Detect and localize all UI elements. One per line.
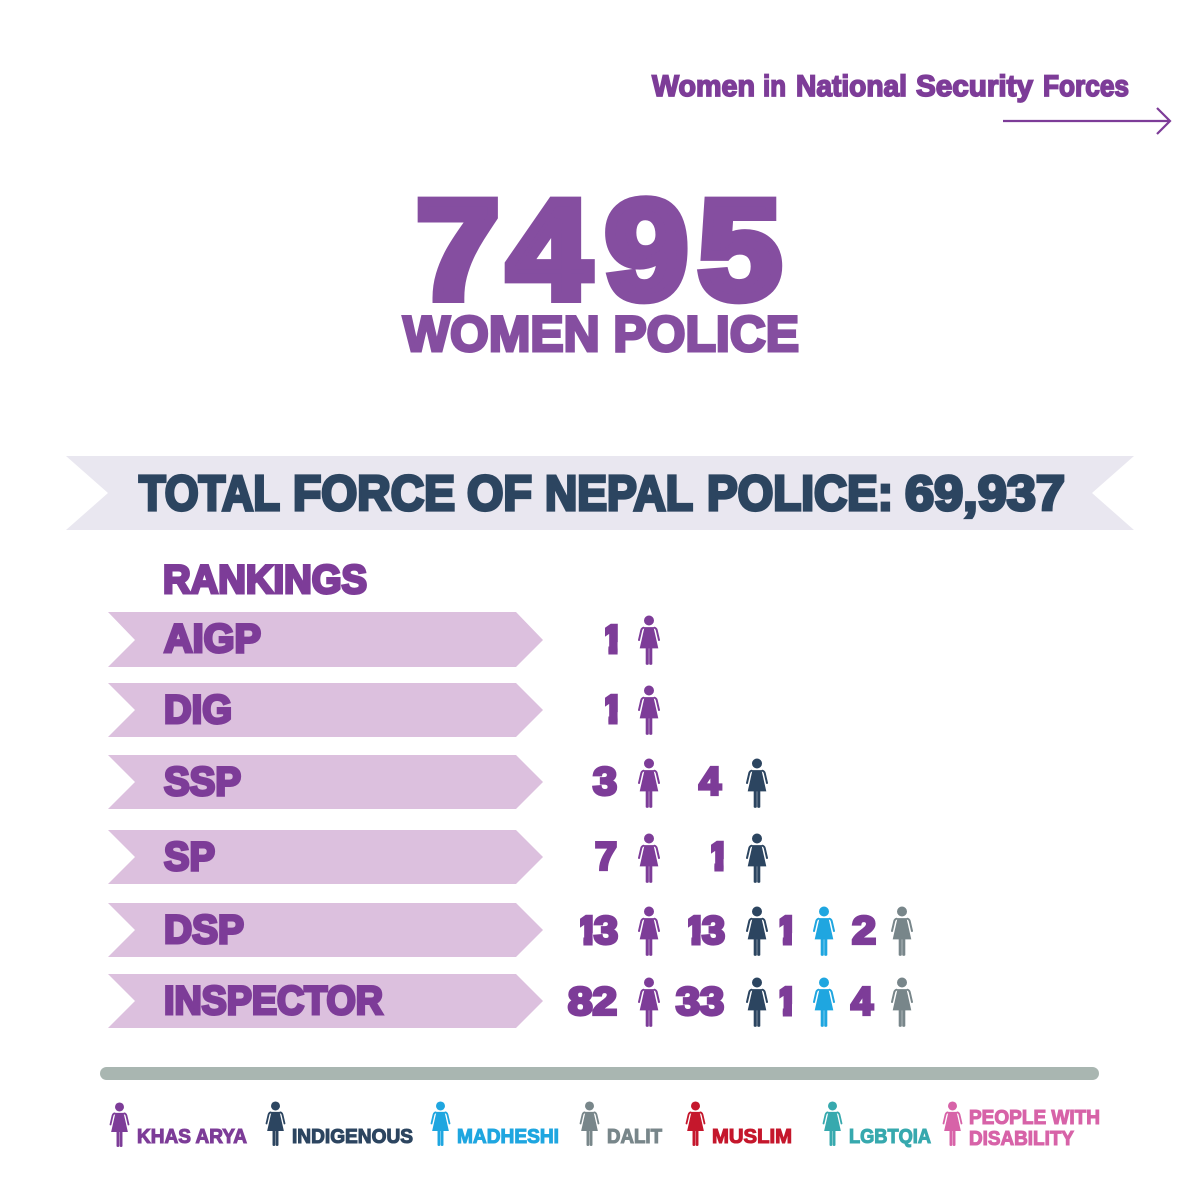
- legend: indigenous: INDIGENOUS: [292, 1126, 413, 1148]
- icon: woman: [892, 978, 912, 1027]
- count: 1: [777, 910, 797, 952]
- rank label: DIG: [164, 688, 232, 732]
- legend: khas arya: [110, 1102, 247, 1148]
- count: 1: [686, 910, 706, 952]
- rank banner: [108, 683, 543, 737]
- legend: people with disability: PEOPLE WITH: [969, 1107, 1100, 1129]
- count: 82: [568, 980, 617, 1024]
- legend: [110, 1101, 1100, 1150]
- section heading: National: [796, 70, 907, 103]
- section heading: in: [763, 70, 786, 103]
- section heading: Forces: [1043, 70, 1129, 103]
- icon: woman: [639, 906, 659, 956]
- ribbon text: [139, 467, 1065, 521]
- rank banner: [108, 612, 543, 667]
- ribbon text: POLICE:: [707, 467, 893, 521]
- count: [580, 914, 618, 946]
- count: 7: [595, 836, 617, 878]
- icon: woman: [747, 834, 767, 883]
- legend: lgbtqia: [824, 1101, 931, 1148]
- ribbon text: TOTAL: [139, 467, 280, 521]
- rank label: INSPECTOR: [164, 979, 383, 1023]
- rank banner: [108, 755, 543, 809]
- icon: woman: [814, 906, 834, 956]
- subtitle: women police: WOMEN POLICE: [403, 306, 799, 362]
- rank banner: [108, 830, 543, 884]
- rank label: SSP: [164, 760, 241, 804]
- icon: woman: [747, 906, 767, 956]
- icon: woman: [639, 686, 659, 735]
- section heading: Security: [916, 70, 1033, 103]
- icon: woman: [814, 978, 834, 1027]
- rank label: AIGP: [164, 617, 261, 661]
- legend: people with disability: DISABILITY: [969, 1128, 1075, 1150]
- legend: people with disability: [944, 1101, 1100, 1150]
- section heading: [652, 70, 1129, 103]
- legend: muslim: [686, 1101, 792, 1148]
- row: AIGP: [108, 612, 659, 667]
- ribbon: total force: [66, 456, 1134, 530]
- ribbon text: FORCE: [293, 467, 455, 521]
- row: INSPECTOR: [108, 974, 912, 1028]
- ribbon text: 69,937: [905, 467, 1065, 521]
- legend: lgbtqia: LGBTQIA: [849, 1126, 931, 1148]
- count: 1: [603, 688, 623, 732]
- count: [688, 914, 726, 946]
- count: 2: [852, 910, 876, 952]
- legend: madheshi: [432, 1101, 559, 1148]
- legend: khas arya: KHAS ARYA: [137, 1126, 247, 1148]
- ribbon shape: [66, 456, 1134, 530]
- ribbon text: NEPAL: [545, 467, 693, 521]
- icon: woman: [892, 906, 912, 956]
- icon: woman: [639, 834, 659, 883]
- rank label: SP: [164, 835, 215, 879]
- count: 4: [851, 980, 873, 1024]
- count: 3: [702, 910, 725, 952]
- icon: woman: [747, 758, 767, 808]
- rank banner: [108, 974, 543, 1028]
- count: 3: [594, 910, 618, 952]
- count: 33: [676, 980, 724, 1024]
- count: 3: [593, 760, 617, 804]
- count: 1: [777, 980, 797, 1024]
- icon: woman: [639, 978, 659, 1027]
- rankings heading: RANKINGS: [163, 558, 367, 602]
- count: 4: [699, 760, 721, 804]
- count: 1: [578, 910, 598, 952]
- legend: madheshi: MADHESHI: [457, 1126, 559, 1148]
- row: DSP: [108, 903, 912, 957]
- arrow: [1003, 108, 1170, 134]
- legend: indigenous: [266, 1101, 413, 1148]
- big number: 7495: [417, 171, 781, 328]
- legend: muslim: MUSLIM: [712, 1126, 792, 1148]
- row: SP: [108, 830, 767, 884]
- divider bar: [100, 1067, 1099, 1080]
- section heading: Women: [652, 70, 755, 103]
- icon: woman: [639, 758, 659, 808]
- count: 1: [709, 836, 729, 878]
- row: SSP: [108, 755, 767, 809]
- legend: dalit: DALIT: [607, 1126, 662, 1148]
- rank label: DSP: [164, 908, 244, 952]
- icon: woman: [639, 616, 659, 665]
- ribbon text: OF: [467, 467, 532, 521]
- icon: woman: [747, 978, 767, 1027]
- row: DIG: [108, 683, 659, 737]
- legend: dalit: [580, 1101, 662, 1148]
- rank banner: [108, 903, 543, 957]
- count: 1: [603, 618, 623, 662]
